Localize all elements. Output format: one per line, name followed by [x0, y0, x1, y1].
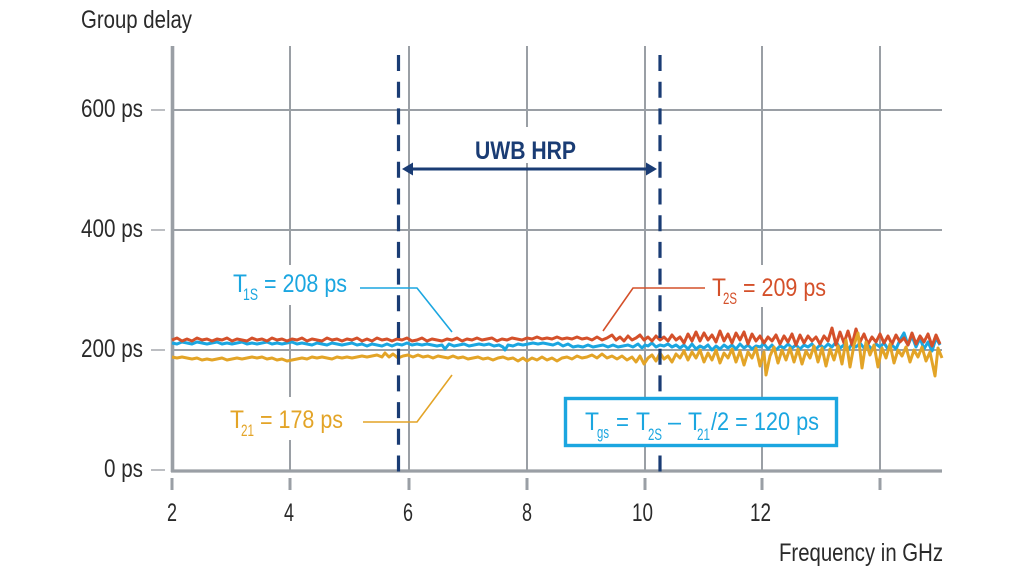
label: UWB HRP: UWB HRP [475, 137, 576, 165]
callout: Tgs formula: T [585, 408, 599, 436]
x axis labels: 2 [167, 499, 177, 527]
label: T1S: 1S [243, 285, 258, 304]
label: T2S: 2S [723, 289, 737, 308]
white label backgrounds over grid [286, 127, 766, 440]
label: T1S: = 208 ps [264, 270, 347, 298]
y axis tick marks [151, 110, 165, 470]
callout: Tgs formula: T [636, 408, 650, 436]
callout: Tgs formula: T [688, 408, 702, 436]
x axis tick marks [172, 478, 880, 490]
label: T1S: T [233, 270, 247, 298]
x axis labels: 10 [632, 499, 653, 527]
arrow: UWB HRP span [402, 162, 657, 176]
y axis title: Group delay [81, 6, 192, 34]
label: T2S: = 209 ps [743, 274, 826, 302]
label: T21 [230, 406, 343, 440]
leader line: T1S [360, 288, 452, 332]
x axis labels: 8 [522, 499, 532, 527]
x axis labels: 6 [403, 499, 413, 527]
callout: Tgs formula: /2 = 120 ps [711, 408, 819, 436]
x axis labels [167, 499, 771, 527]
UWB HRP band limit: upper [658, 55, 662, 472]
trace: T21 yellow [172, 333, 942, 376]
label: T1S [233, 270, 347, 304]
leader line: T2S [603, 288, 705, 331]
callout: Tgs formula: = [616, 408, 629, 436]
axes [171, 46, 942, 472]
y axis labels: 600 ps [81, 95, 143, 123]
label: T2S [712, 274, 826, 308]
x axis labels: 12 [750, 499, 771, 527]
label: T21: 21 [241, 421, 254, 440]
leader line: T21 [363, 375, 452, 422]
trace: T2S red [172, 328, 940, 346]
label: T21: = 178 ps [260, 406, 343, 434]
callout: Tgs formula: 21 [697, 425, 710, 444]
x axis labels: 4 [284, 499, 294, 527]
label: T21: T [230, 406, 244, 434]
x axis title: Frequency in GHz [779, 539, 943, 567]
callout: Tgs formula: – [668, 408, 681, 436]
y axis labels: 400 ps [81, 215, 143, 243]
y axis labels [81, 95, 143, 483]
label: T2S: T [712, 274, 726, 302]
callout: Tgs formula [566, 398, 836, 446]
y axis labels: 200 ps [81, 335, 143, 363]
y axis labels: 0 ps [104, 455, 143, 483]
trace: T1S blue [172, 333, 940, 351]
UWB HRP band limit: lower [397, 55, 400, 472]
callout: Tgs formula: 2S [648, 425, 662, 444]
grid lines [172, 46, 942, 470]
callout: Tgs formula: gs [597, 423, 609, 442]
